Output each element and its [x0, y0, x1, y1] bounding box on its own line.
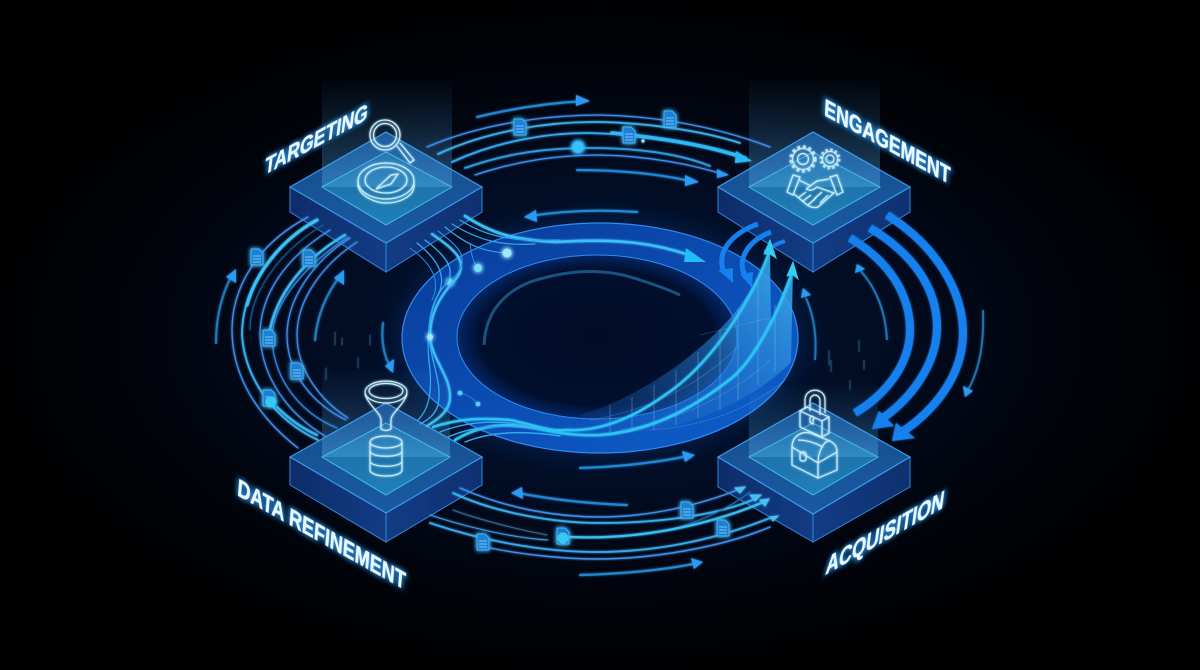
- block: data refinement: [290, 370, 482, 542]
- central ring: [395, 216, 805, 460]
- icon: gears: [791, 147, 839, 171]
- top arcs: targeting to engagement: [427, 95, 770, 222]
- flow lines: targeting into ring with arrow: [445, 216, 706, 286]
- icon: funnel: [365, 381, 407, 430]
- icon: handshake: [787, 175, 843, 208]
- right arcs: thick arrows engagement to acquisition: [801, 215, 983, 441]
- flow lines: left bundle down the ring: [410, 231, 480, 426]
- growth ribbon with grid: [580, 247, 793, 432]
- icon: database: [370, 436, 402, 476]
- glowing node on left arcs: [263, 390, 276, 408]
- flow lines: bottom bundle rising to engagement: [433, 240, 798, 442]
- label: acquisition: ACQUISITION: [824, 485, 946, 581]
- label: targeting: TARGETING: [263, 99, 369, 181]
- icon: compass: [358, 163, 414, 203]
- block: targeting: [290, 80, 482, 272]
- glowing node on bottom arcs: [557, 528, 569, 544]
- document icons on left arcs: [251, 249, 315, 379]
- block: acquisition: [718, 385, 910, 542]
- document icons on top arcs: [514, 111, 676, 143]
- icon: treasure chest: [792, 433, 837, 478]
- document icons on bottom arcs: [477, 502, 729, 550]
- small curved arrows at ring: [718, 224, 785, 288]
- block: engagement: [718, 80, 910, 272]
- label: data refinement: DATA REFINEMENT: [237, 475, 407, 596]
- bottom arcs: data refinement to acquisition: [430, 451, 778, 575]
- label: engagement: ENGAGEMENT: [824, 95, 951, 190]
- icon: padlock: [800, 390, 829, 437]
- left arcs: data refinement to targeting: [216, 217, 394, 448]
- icon: magnifier: [370, 120, 414, 163]
